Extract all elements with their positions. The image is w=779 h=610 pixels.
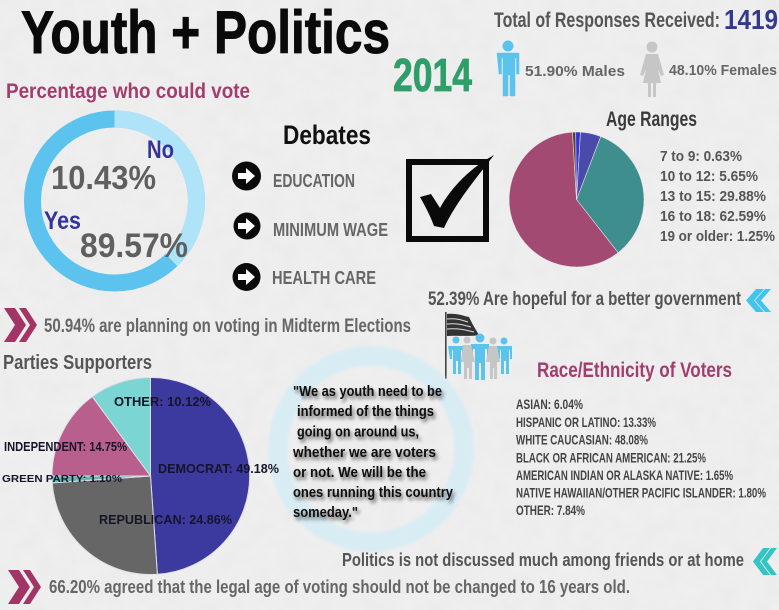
pie chart: parties supporters: INDEPENDENT: 14.75% xyxy=(4,440,127,454)
age legend: 7 to 9: 0.63% xyxy=(660,148,742,165)
label: males: 51.90% Males xyxy=(525,64,625,80)
donut chart: percentage who could vote: 10.43% xyxy=(51,159,156,196)
donut chart: percentage who could vote: Yes xyxy=(44,207,81,235)
debates list xyxy=(232,162,388,291)
heading: race and ethnicity: Race/Ethnicity of Voters xyxy=(537,359,732,382)
donut chart: percentage who could vote xyxy=(32,119,196,283)
quote text: "We as youth need to be xyxy=(293,383,442,400)
quote ring xyxy=(278,356,464,542)
icon: arrow health care xyxy=(232,263,260,291)
icon: chevrons midterm xyxy=(4,308,37,342)
age legend: 10 to 12: 5.65% xyxy=(660,168,758,185)
year: 2014 xyxy=(393,49,472,101)
age legend xyxy=(660,148,775,245)
age legend: 16 to 18: 62.59% xyxy=(660,208,766,225)
debate: education: EDUCATION xyxy=(273,171,355,191)
race and ethnicity list: WHITE CAUCASIAN: 48.08% xyxy=(516,432,648,448)
heading: parties supporters: Parties Supporters xyxy=(3,352,152,374)
icon: chevrons voting age xyxy=(8,570,41,604)
quote text: informed of the things xyxy=(297,403,434,420)
icon: chevrons hopeful xyxy=(746,289,771,312)
pie chart: parties supporters: DEMOCRAT: 49.18% xyxy=(158,462,279,476)
age legend: 13 to 15: 29.88% xyxy=(660,188,766,205)
debate: health care: HEALTH CARE xyxy=(272,268,376,288)
icon: flag and people xyxy=(445,312,512,380)
race and ethnicity list: ASIAN: 6.04% xyxy=(516,396,583,412)
icon: arrow education xyxy=(232,162,261,190)
race and ethnicity list: OTHER: 7.84% xyxy=(516,502,585,518)
heading: debates: Debates xyxy=(283,120,371,150)
quote text: going on around us, xyxy=(297,424,419,440)
callout: legal voting age: 66.20% agreed that the legal age of voting should not be changed to 16 years old. xyxy=(49,576,630,597)
quote text xyxy=(292,383,454,521)
title: Youth + Politics xyxy=(21,0,390,66)
icon: arrow minimum wage xyxy=(234,212,260,240)
donut chart: percentage who could vote: No xyxy=(147,136,174,164)
pie chart: parties supporters: GREEN PARTY: 1.10% xyxy=(2,473,123,485)
icon: chevrons politics xyxy=(753,548,777,575)
donut chart: percentage who could vote: 89.57% xyxy=(80,227,188,265)
callout: midterm: 50.94% are planning on voting in Midterm Elections xyxy=(44,316,411,337)
debate: minimum wage: MINIMUM WAGE xyxy=(273,220,388,240)
heading: age ranges: Age Ranges xyxy=(606,108,697,131)
heading: percentage who could vote: Percentage who could vote xyxy=(6,80,250,103)
icon: male xyxy=(497,40,519,96)
quote text: ones running this country xyxy=(293,484,454,501)
icon: female xyxy=(640,42,664,97)
label: females: 48.10% Females xyxy=(669,63,777,79)
race and ethnicity list: HISPANIC OR LATINO: 13.33% xyxy=(516,414,656,430)
pie chart: parties supporters xyxy=(2,377,279,575)
quote text: someday." xyxy=(293,504,358,521)
pie chart: parties supporters: REPUBLICAN: 24.86% xyxy=(99,513,232,527)
icon: checkbox xyxy=(409,155,494,239)
quote text: or not. We will be the xyxy=(293,464,426,481)
race and ethnicity list xyxy=(516,396,766,518)
pie chart: parties supporters: OTHER: 10.12% xyxy=(114,395,211,409)
quote text: whether we are voters xyxy=(292,444,436,461)
pie chart: age ranges xyxy=(509,132,644,267)
